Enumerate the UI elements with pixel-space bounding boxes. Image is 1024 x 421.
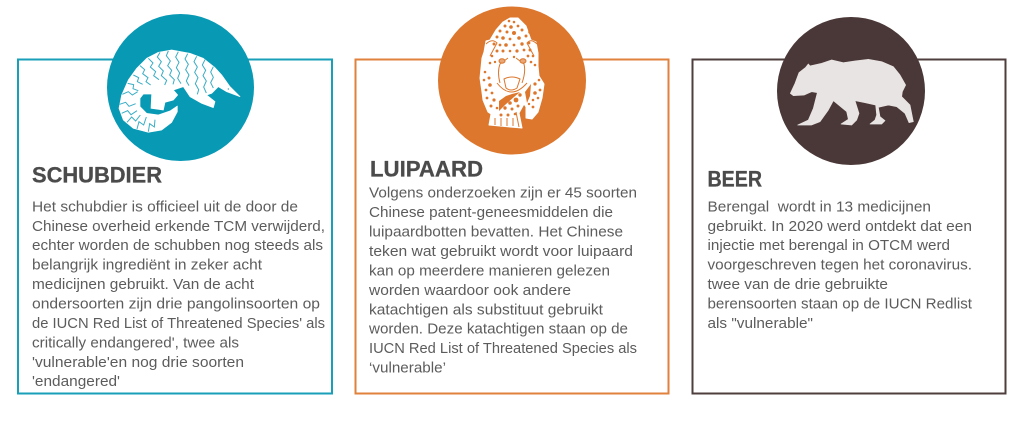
heading: schubdier: SCHUBDIER [32, 163, 162, 188]
panel: beer [692, 17, 1006, 394]
text block: luipaard: teken wat gebruikt wordt voor luipaard [369, 243, 633, 260]
panel: schubdier [18, 14, 332, 394]
text block: schubdier: de IUCN Red List of Threatened Species' als [32, 315, 325, 332]
text block: schubdier: 'vulnerable'en nog drie soorten [32, 354, 244, 371]
text block: schubdier: medicijnen gebruikt. Van de acht [32, 276, 255, 293]
text block: beer: Berengal wordt in 13 medicijnen [708, 199, 931, 216]
text block: beer: voorgeschreven tegen het coronavirus. [708, 256, 972, 274]
panel: luipaard [356, 6, 668, 394]
text block: beer: gebruikt. In 2020 werd ontdekt dat een [708, 218, 972, 235]
text block: schubdier: Het schubdier is officieel uit de door de [32, 199, 298, 216]
text block: luipaard: Chinese patent-geneesmiddelen die [369, 204, 613, 221]
text block: schubdier: Chinese overheid erkende TCM verwijderd, [32, 218, 325, 235]
heading: beer: BEER [708, 167, 762, 192]
text block: beer: injectie met berengal in OTCM werd [708, 237, 950, 254]
text block: luipaard: kan op meerdere manieren gelezen [369, 262, 610, 279]
text block: luipaard: worden waardoor ook andere [368, 282, 571, 299]
text block: beer: twee van de drie gebruikte [708, 276, 888, 293]
icon: teal circle with pangolin [107, 14, 254, 161]
text block: schubdier: 'endangered' [32, 373, 120, 390]
text block: luipaard: katachtigen als substituut gebruikt [369, 301, 604, 318]
text block: beer [708, 199, 973, 332]
text block: schubdier: critically endangered', twee als [32, 334, 239, 351]
icon: brown circle with bear [777, 17, 925, 165]
panel border: beer [692, 60, 1006, 394]
text block: luipaard: worden. Deze katachtigen staan op de [368, 321, 628, 338]
text block: luipaard: Volgens onderzoeken zijn er 45 soorten [369, 184, 637, 201]
text block: schubdier: belangrijk ingrediënt in zeker acht [32, 256, 263, 274]
text block: luipaard: IUCN Red List of Threatened Species als [369, 340, 637, 357]
icon: orange circle with leopard [438, 6, 586, 154]
text block: luipaard: ‘vulnerable’ [369, 360, 446, 377]
text block: beer: als "vulnerable" [708, 315, 813, 332]
text block: luipaard: luipaardbotten bevatten. Het Chinese [369, 224, 623, 240]
panel border: luipaard [356, 60, 668, 394]
text block: beer: berensoorten staan op de IUCN Redlist [708, 296, 973, 313]
text block: schubdier [32, 199, 325, 390]
heading: luipaard: LUIPAARD [370, 157, 483, 182]
text block: schubdier: echter worden de schubben nog steeds als [32, 237, 323, 254]
text block: luipaard [368, 184, 637, 377]
panel border: schubdier [18, 60, 332, 394]
text block: schubdier: ondersoorten zijn drie pangolinsoorten op [32, 295, 320, 312]
